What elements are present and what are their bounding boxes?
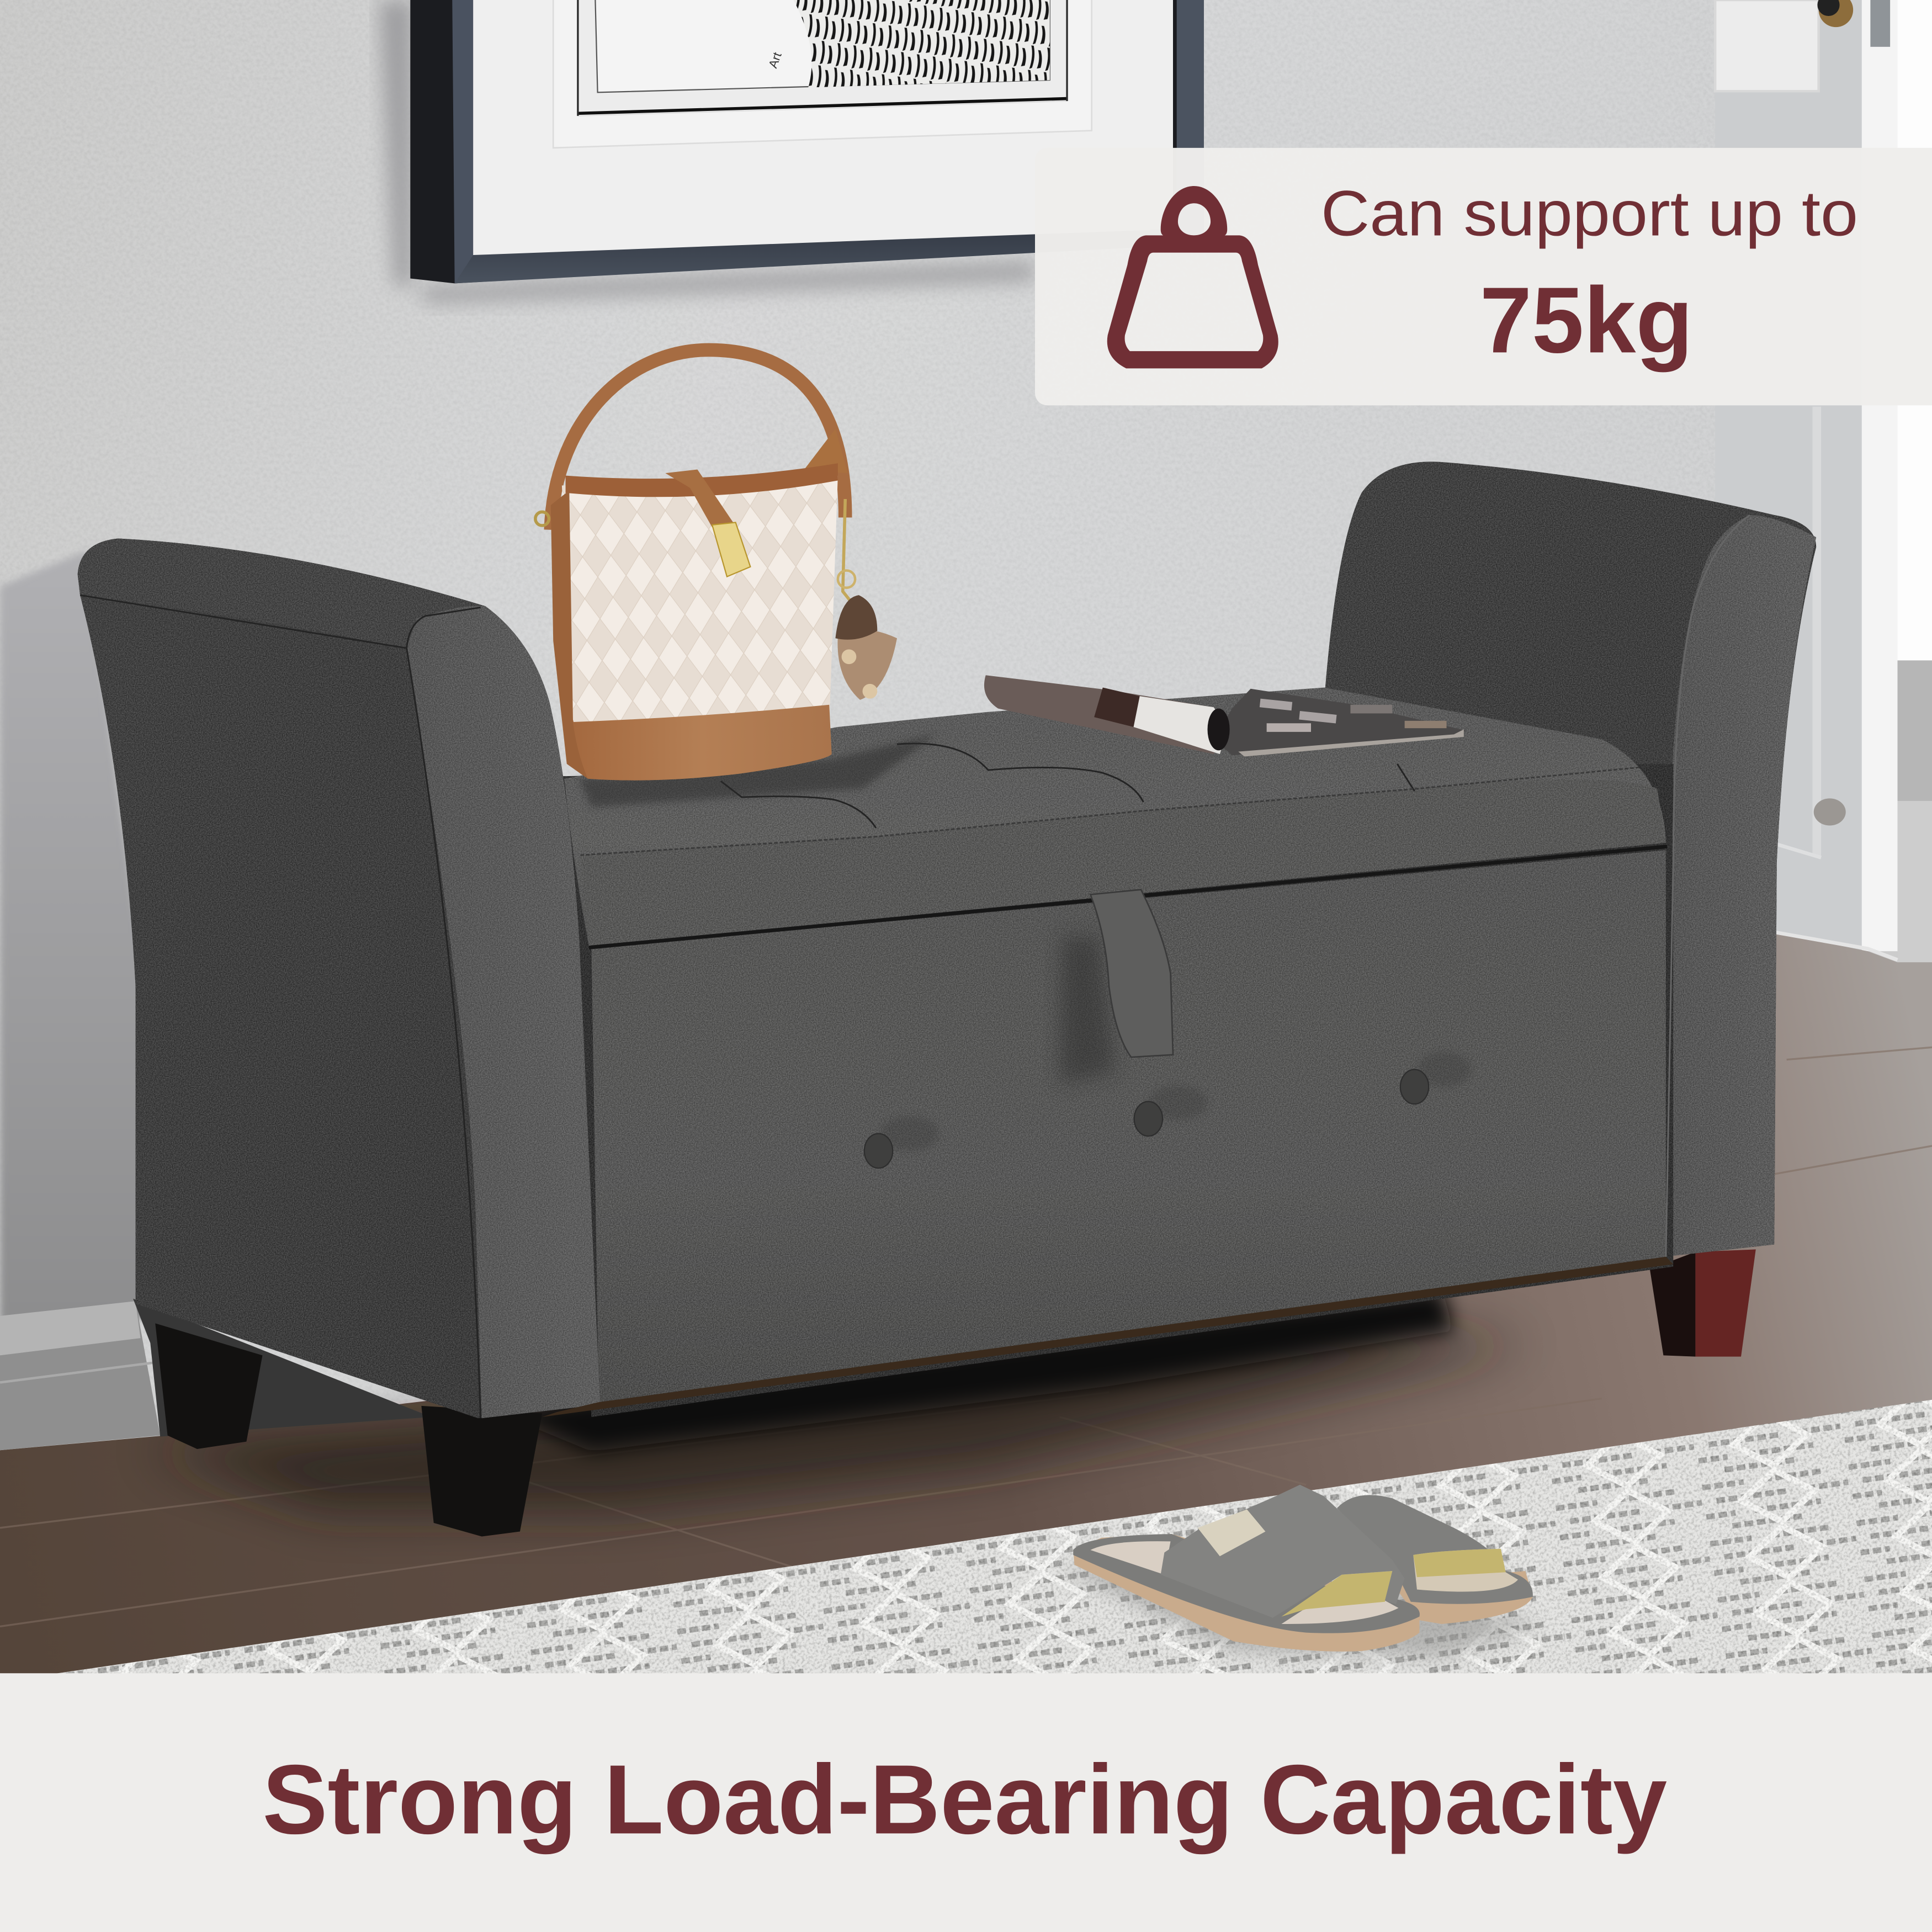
- baseboard: [0, 1301, 160, 1450]
- bag rim: [566, 463, 838, 497]
- bag base: [573, 705, 832, 781]
- icon: weight: [1107, 186, 1278, 368]
- wooden floor: [0, 932, 1932, 1676]
- bench seams: [80, 515, 1750, 1418]
- front slipper upper: [1161, 1485, 1405, 1618]
- footbed: [1090, 1541, 1171, 1575]
- badge text: support: Can support up to: [1321, 177, 1858, 249]
- right arm: [1325, 461, 1816, 1257]
- gold clasp: [712, 522, 750, 577]
- strap handle: [1090, 890, 1173, 1057]
- bag body: [562, 476, 838, 733]
- seat cushion: [564, 688, 1666, 946]
- bag strap: [665, 469, 733, 527]
- bag handle: [551, 350, 845, 530]
- bottom rail: [542, 1257, 1673, 1417]
- slippers: [1073, 1485, 1533, 1652]
- badge value: 75kg: 75kg: [1480, 267, 1693, 372]
- back slipper: [1337, 1495, 1533, 1624]
- bench legs: [155, 1249, 1756, 1536]
- handbag: [535, 350, 936, 807]
- front slipper sole: [1073, 1534, 1419, 1652]
- bag side ring: [535, 512, 549, 526]
- door and door frame: [1715, 0, 1932, 973]
- handle shadow: [1060, 936, 1115, 1084]
- rug: [49, 1400, 1932, 1676]
- seat and panel shadow line: [589, 846, 1667, 948]
- bag left trim: [551, 490, 588, 779]
- bench dark backing: [554, 764, 1673, 1417]
- bench upholstery body: [78, 461, 1816, 1418]
- info badge: [1035, 148, 1932, 405]
- tufted buttons: [864, 1052, 1471, 1168]
- bottom banner: [0, 1673, 1932, 1932]
- framed picture: Art: [766, 50, 784, 70]
- bag shadow on seat: [579, 734, 936, 807]
- dark wall under arm: [133, 1299, 431, 1437]
- left arm: [78, 538, 600, 1418]
- bench: [78, 461, 1816, 1536]
- keychain charm: [835, 499, 897, 700]
- fabric label: [1198, 1509, 1265, 1556]
- magazine: [984, 675, 1466, 757]
- framed picture: [410, 0, 1204, 283]
- main heading: Strong Load-Bearing Capacity: [262, 1744, 1667, 1854]
- front slipper rim: [1073, 1534, 1420, 1633]
- wall: [0, 0, 1719, 1479]
- storage front panel: [591, 850, 1666, 1402]
